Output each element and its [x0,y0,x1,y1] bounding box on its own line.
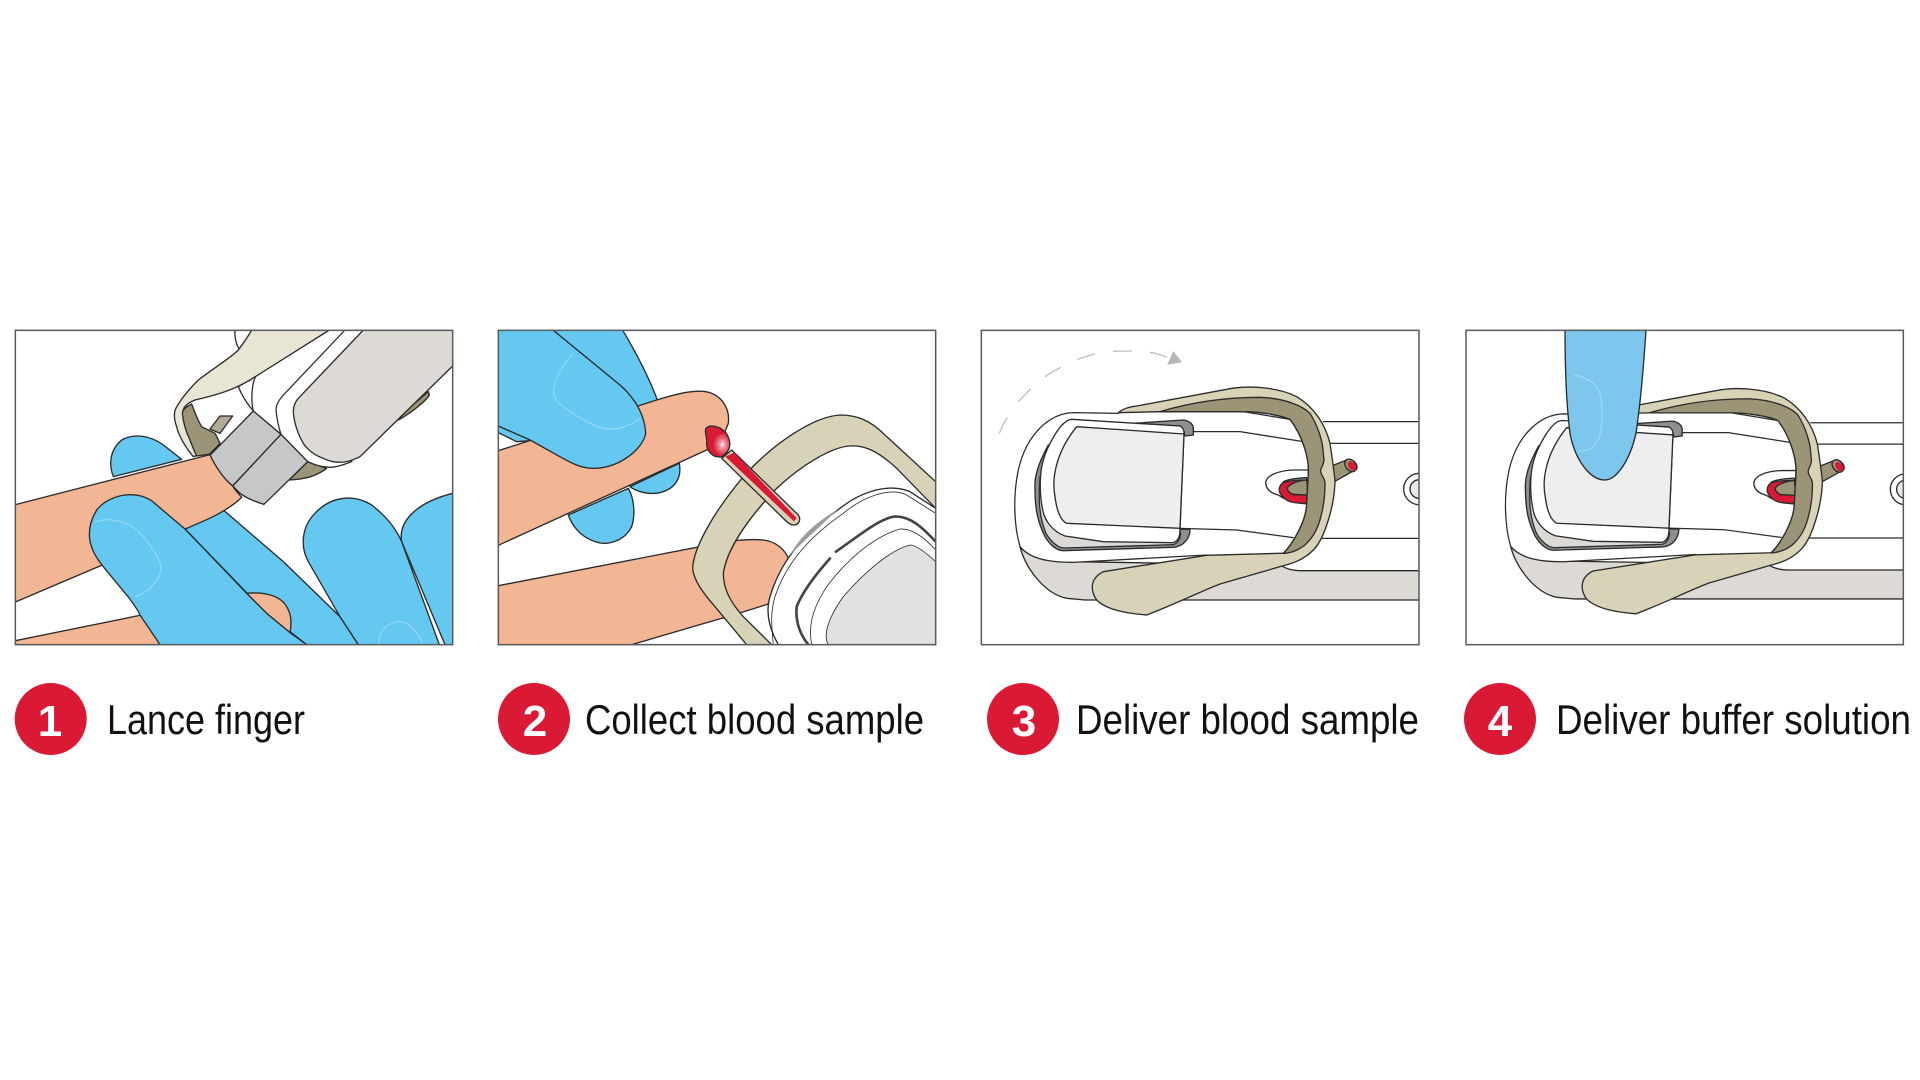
step 1 label: 1 [38,697,62,746]
panel: step 1 lance finger [15,330,453,645]
arrow: curved dashed rotation arrow [999,351,1182,433]
step 4 label [1464,683,1911,755]
panel: step 3 deliver blood sample [981,330,1443,645]
step 3 label: 3 [1012,697,1036,746]
step 3 label [987,683,1419,755]
icon: device [1505,389,1920,614]
step 3 label: Deliver blood sample [1076,696,1419,743]
step 1 label [15,683,305,755]
step 4 label: 4 [1488,697,1513,746]
icon: gloved finger pressing buffer [1565,330,1646,480]
step 1 label: Lance finger [107,696,305,743]
icon: device with loaded capillary [1015,387,1443,615]
step 2 label: 2 [523,697,547,746]
step 2 label: Collect blood sample [585,696,924,743]
panel: step 2 collect blood sample [498,330,936,645]
panel: step 4 deliver buffer solution [1466,330,1920,645]
step 2 label [498,683,924,755]
